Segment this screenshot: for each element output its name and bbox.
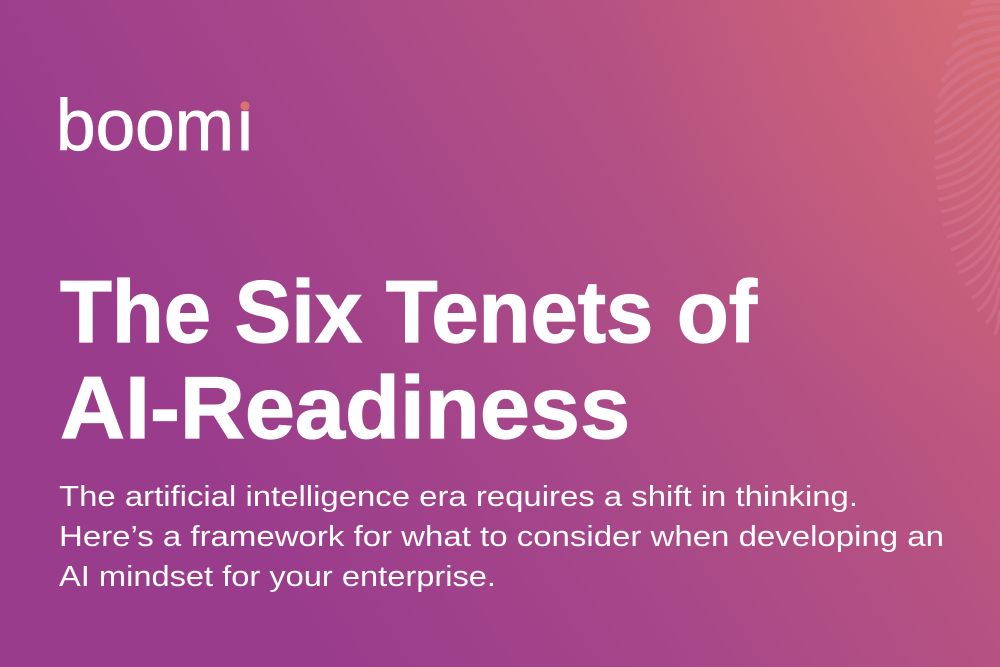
logo: boomi: boom: [56, 86, 234, 166]
logo: boomi: [60, 97, 250, 152]
title: AI-Readiness: [60, 358, 630, 457]
title: The Six Tenets of: [60, 262, 758, 361]
logo dot: [240, 101, 250, 111]
subtitle: The artificial intelligence era requires a shift in thinking.: [59, 481, 858, 513]
subtitle: AI mindset for your enterprise.: [59, 561, 496, 593]
title: [60, 262, 758, 457]
subtitle: Here’s a framework for what to consider when developing an: [59, 521, 944, 553]
logo: boomi: i: [237, 86, 253, 166]
subtitle: [59, 481, 944, 593]
fingerprint pattern: [935, 0, 1000, 335]
